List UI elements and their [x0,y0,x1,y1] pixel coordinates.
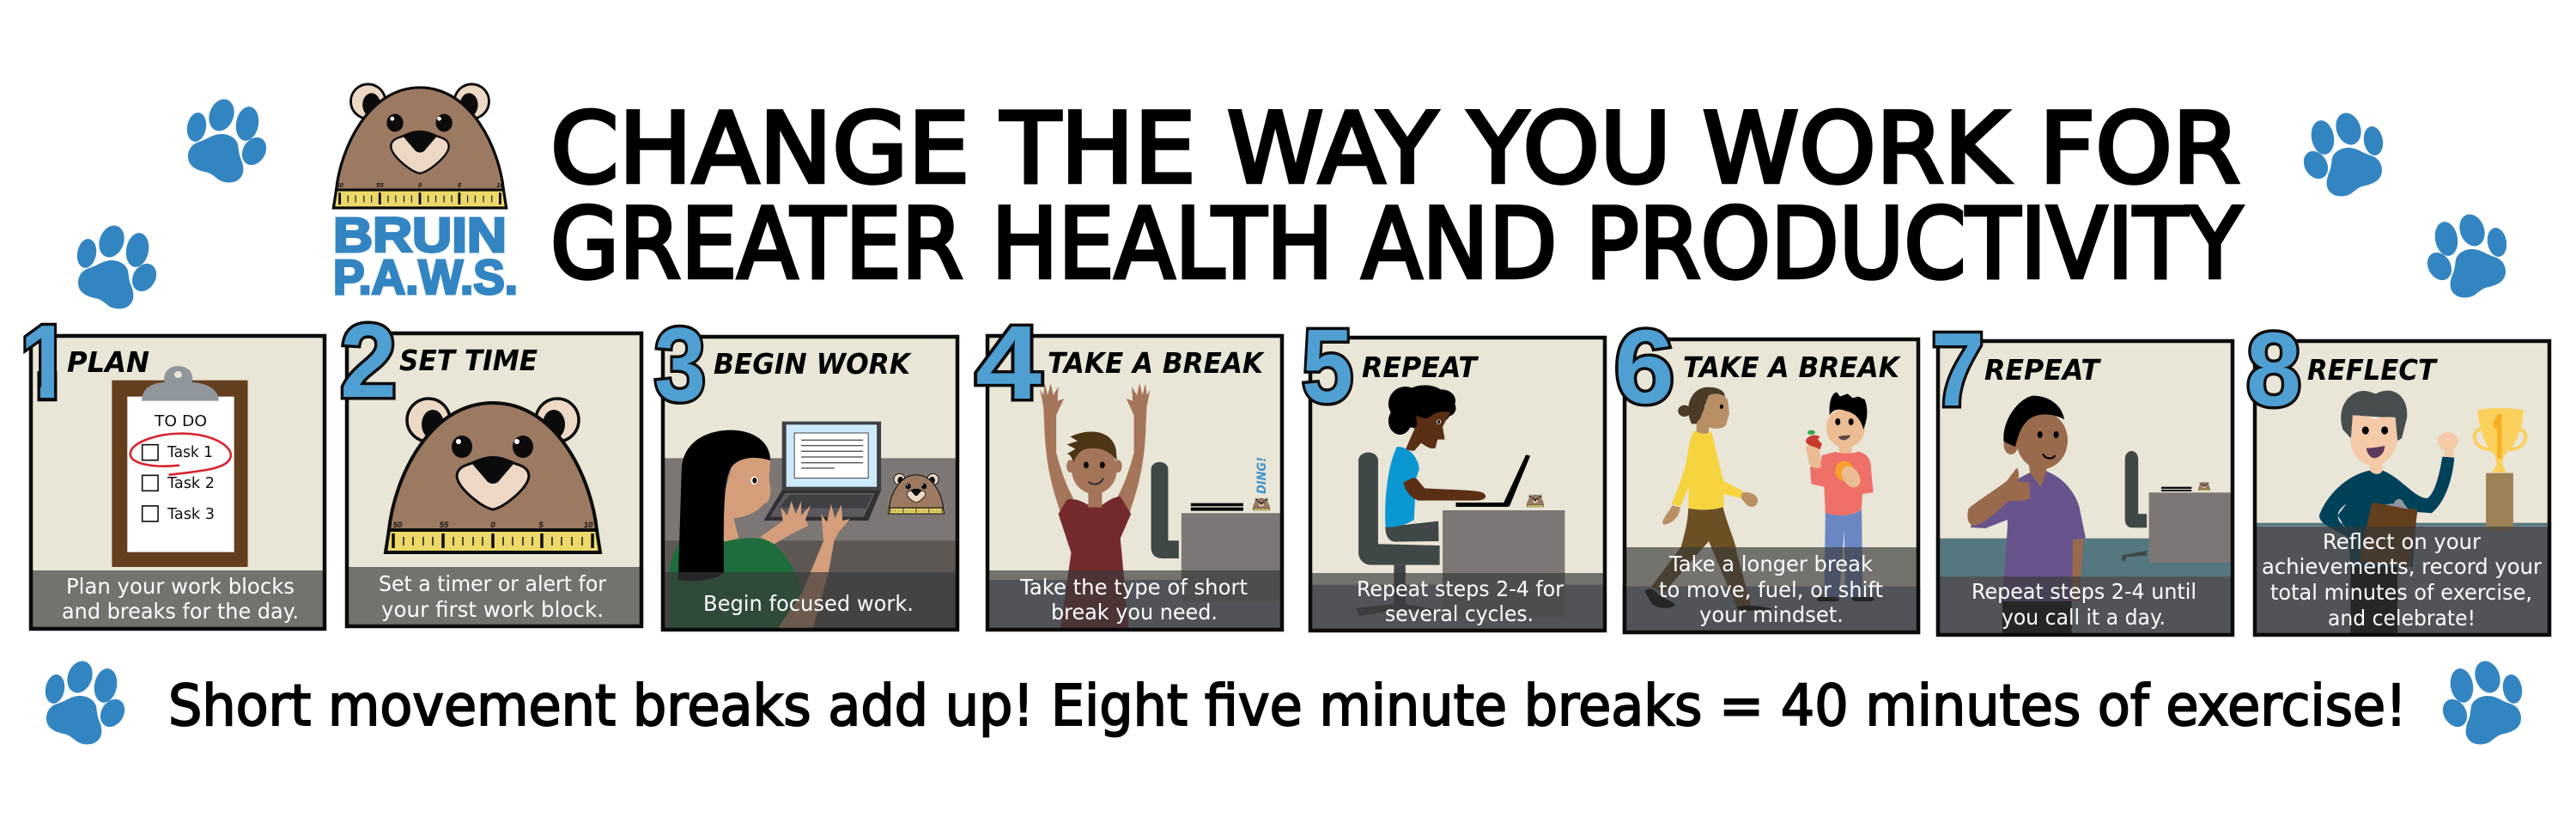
caption band [986,570,1284,631]
logo wordmark line 2: P.A.W.S. [333,250,518,305]
illustration: seated person typing [1309,385,1607,632]
illustration: person thumbs up [1936,396,2234,637]
caption: break you need. [1051,600,1218,625]
icon: mini bear [1527,495,1544,507]
panel: step 8 reflect [2246,311,2551,637]
task 3: Task 3 [167,505,215,523]
caption band [1623,547,1920,634]
icon: bear timer: 10 [584,521,593,530]
caption: Begin focused work. [703,591,914,616]
panel: step 2 set time [340,302,643,628]
icon: logo bear: 5 [458,181,462,189]
caption: Plan your work blocks [66,574,295,599]
illustration: person with trophy [2253,391,2551,637]
illustration: person stretching [986,383,1284,631]
heading: PLAN [67,345,149,379]
panel: step 1 plan [20,303,326,631]
icon: logo bear: 55 [376,181,384,189]
heading: TAKE A BREAK [1048,346,1265,380]
caption: Repeat steps 2-4 for [1357,576,1564,601]
panel: step 3 begin work [654,306,959,631]
step number 4: 4 [975,304,1042,421]
caption: your mindset. [1699,602,1844,627]
panel: step 7 repeat [1931,311,2234,637]
logo: Bruin PAWS [333,84,518,305]
step number 5: 5 [1302,308,1353,424]
heading: REFLECT [2307,353,2438,387]
step number 7: 7 [1931,311,1984,428]
illustration: woman at laptop [661,422,959,631]
icon: paw top right lower [2422,210,2509,297]
caption band [29,570,326,631]
panel: step 5 repeat [1302,308,1607,632]
icon: bear timer [386,399,600,552]
task 1: Task 1 [167,443,213,461]
icon: bear timer: 5 [538,521,544,530]
icon: paw top left upper [185,95,271,182]
step number 1 [23,323,57,402]
caption band [1936,576,2234,637]
title line 1: CHANGE THE WAY YOU WORK FOR [550,92,2240,205]
caption: and celebrate! [2328,606,2476,631]
caption: Set a timer or alert for [379,571,607,596]
heading: SET TIME [399,344,538,377]
icon: paw top right upper [2299,109,2385,196]
caption: your first work block. [381,597,604,622]
caption: to move, fuel, or shift [1659,577,1883,602]
step number 6: 6 [1614,308,1674,425]
footer message: Short movement breaks add up! Eight five minute breaks = 40 minutes of exercise! [168,673,2407,739]
icon: bear timer: 55 [440,521,449,530]
icon: mini bear [2198,482,2210,491]
title line 2: GREATER HEALTH AND PRODUCTIVITY [550,187,2243,301]
step number 1: 1 [20,303,71,420]
panel: step 4 take a break [975,304,1284,631]
panel: step 6 take a break [1614,308,1920,634]
caption band [661,572,959,631]
caption band [2253,527,2551,637]
icon: paw top left lower [75,222,161,308]
caption: total minutes of exercise, [2270,580,2532,605]
icon: mini bear [1253,498,1270,510]
caption: achievements, record your [2262,554,2543,579]
step number 2: 2 [340,302,397,419]
heading: TAKE A BREAK [1683,350,1901,384]
ding label: DING! [1255,457,1269,494]
caption: Take a longer break [1668,552,1873,576]
icon: logo bear: 10 [496,181,504,189]
icon: logo bear: 0 [418,181,422,189]
trophy number: 1 [2490,411,2507,466]
caption: you call it a day. [2002,605,2166,630]
caption: Reflect on your [2323,529,2482,554]
to do text: TO DO [154,412,207,430]
icon: bear timer: 50 [393,521,403,530]
caption band [345,567,643,628]
icon: bear timer: 0 [490,521,495,530]
icon: mini bear [888,473,945,514]
title [550,92,2243,301]
icon: logo bear [333,84,507,208]
icon: logo bear: 50 [336,181,344,189]
icon: clipboard [112,366,248,567]
step number 8: 8 [2246,311,2301,428]
logo wordmark line 1: BRUIN [333,208,507,263]
caption: Repeat steps 2-4 until [1971,579,2196,604]
caption: and breaks for the day. [62,599,299,624]
icon: paw bottom right [2438,657,2524,744]
caption band [1309,573,1607,632]
caption: Take the type of short [1019,575,1248,600]
caption: several cycles. [1385,601,1534,626]
illustration: walker and snacker [1623,387,1920,634]
heading: REPEAT [1984,353,2101,387]
heading: BEGIN WORK [714,347,912,381]
task 2: Task 2 [167,474,215,492]
icon: paw bottom left [43,657,130,744]
heading: REPEAT [1362,350,1479,384]
step number 3: 3 [654,306,706,423]
